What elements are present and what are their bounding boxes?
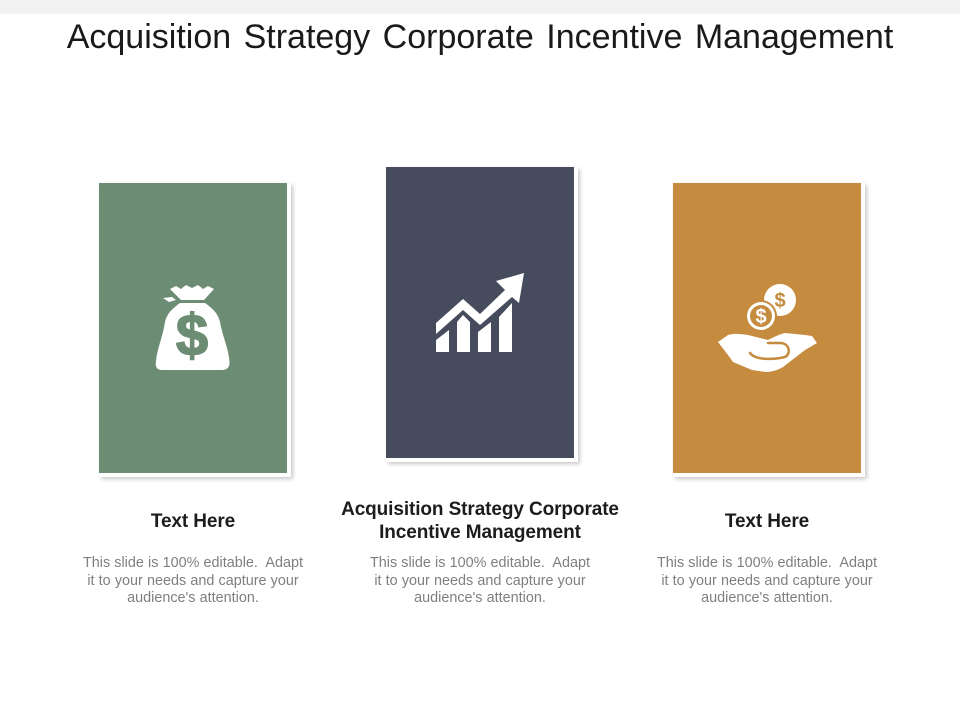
text block: center: This slide is 100% editable. Adapt: [370, 555, 590, 571]
title: Acquisition Strategy Corporate Incentive Management: [67, 18, 893, 56]
icon: money bag: $: [176, 303, 208, 368]
text block: right: This slide is 100% editable. Adapt: [657, 555, 877, 571]
heading: left: Text Here: [151, 511, 235, 532]
top bar: [0, 0, 960, 14]
text block: center: audience's attention.: [414, 590, 546, 606]
icon: growth chart with arrow: [436, 273, 524, 352]
heading: right: Text Here: [725, 511, 809, 532]
panel: green card: [99, 183, 291, 477]
heading: center: Acquisition Strategy Corporate: [341, 499, 619, 520]
text block: left: it to your needs and capture your: [87, 573, 299, 589]
heading: center: [341, 499, 619, 543]
icon: hand with coins: [718, 284, 817, 372]
text block: right: it to your needs and capture your: [661, 573, 873, 589]
text block: left: This slide is 100% editable. Adapt: [83, 555, 303, 571]
panel: ochre card: [673, 183, 865, 477]
text block: right: [657, 555, 877, 606]
heading: center: Incentive Management: [379, 522, 581, 543]
text block: left: audience's attention.: [127, 590, 259, 606]
icon: hand with coins: $: [774, 290, 786, 312]
panel: slate card: [386, 167, 578, 462]
text block: right: audience's attention.: [701, 590, 833, 606]
text block: left: [83, 555, 303, 606]
text block: center: it to your needs and capture your: [374, 573, 586, 589]
icon: hand with coins: $: [755, 306, 767, 328]
text block: center: [370, 555, 590, 606]
icon: money bag: [156, 285, 230, 370]
